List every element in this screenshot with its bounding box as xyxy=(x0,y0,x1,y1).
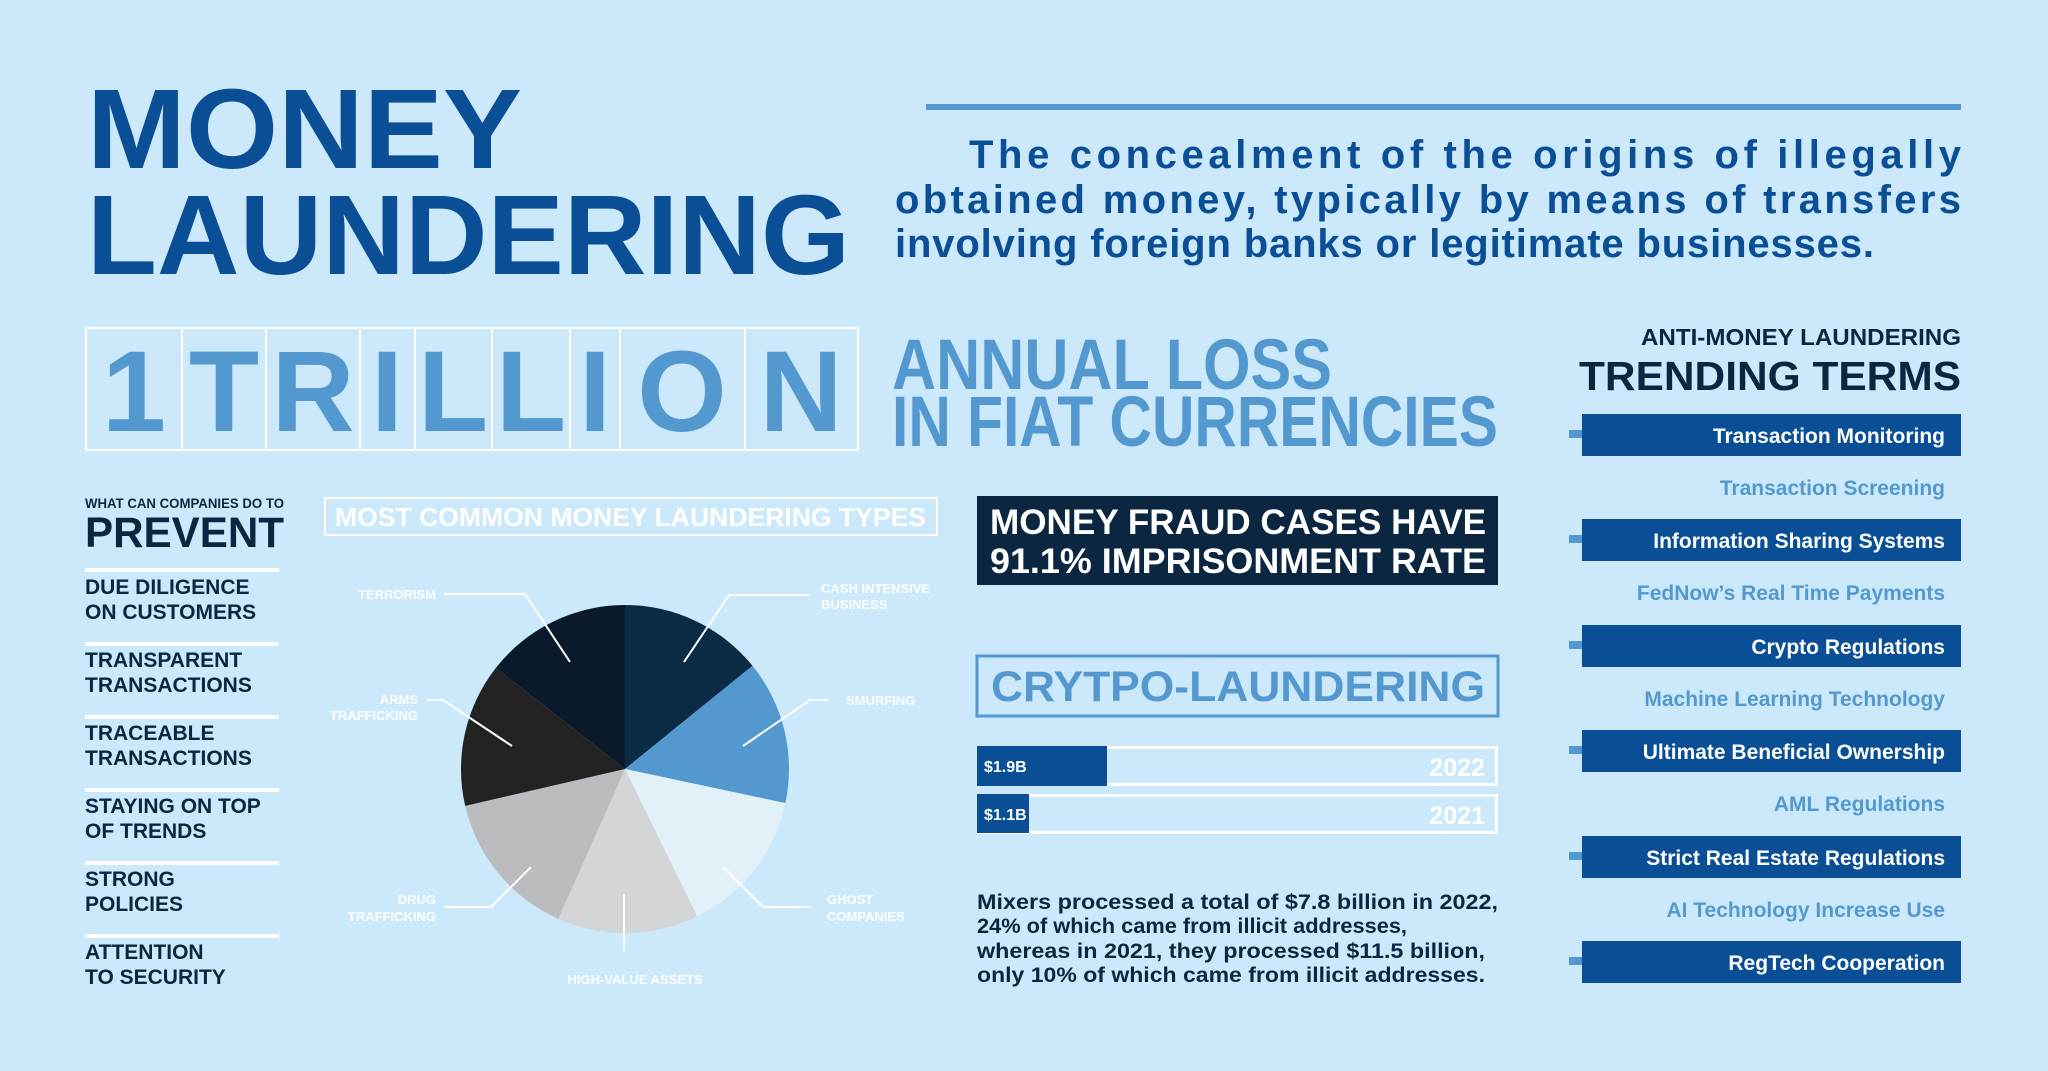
imprisonment rate callout: MONEY FRAUD CASES HAVE xyxy=(990,503,1486,542)
crypto laundering heading: CRYTPO-LAUNDERING xyxy=(991,663,1485,711)
pie chart: laundering types: GHOST xyxy=(827,892,873,907)
bar chart: crypto laundering: $1.9B xyxy=(984,759,1027,776)
bar chart: crypto laundering: 2022 xyxy=(1429,754,1485,782)
prevent list: TO SECURITY xyxy=(85,966,226,989)
annual loss heading: IN FIAT CURRENCIES xyxy=(892,383,1498,462)
prevent list: OF TRENDS xyxy=(85,820,206,843)
mixers paragraph: whereas in 2021, they processed $11.5 billion, xyxy=(976,940,1485,963)
term: FedNow: FedNow’s Real Time Payments xyxy=(1637,582,1945,605)
trending terms list xyxy=(1569,414,1961,983)
prevent heading: WHAT CAN COMPANIES DO TO xyxy=(85,495,284,511)
term: Transaction Screening: Transaction Screening xyxy=(1720,477,1945,500)
1 trillion stat box: R xyxy=(271,328,355,456)
1 trillion stat box: I xyxy=(371,328,403,456)
pie chart: laundering types: HIGH-VALUE ASSETS xyxy=(567,972,703,987)
term: AI Technology: AI Technology Increase Use xyxy=(1666,899,1945,922)
prevent list xyxy=(85,568,279,989)
1 trillion stat box xyxy=(86,328,858,456)
mixers paragraph: only 10% of which came from illicit addresses. xyxy=(977,964,1485,987)
term: Strict Real Estate: Strict Real Estate Regulations xyxy=(1646,847,1945,870)
prevent list: TRANSACTIONS xyxy=(85,674,252,697)
annual loss heading: ANNUAL LOSS xyxy=(892,326,1332,405)
1 trillion stat box: L xyxy=(418,328,488,456)
pie chart: laundering types xyxy=(330,581,930,987)
pie chart heading: MOST COMMON MONEY LAUNDERING TYPES xyxy=(335,502,926,532)
annual loss heading xyxy=(892,326,1498,462)
imprisonment rate callout xyxy=(977,496,1498,585)
term: RegTech: RegTech Cooperation xyxy=(1728,952,1945,975)
trending terms heading: TRENDING TERMS xyxy=(1579,353,1961,399)
term: UBO xyxy=(1569,730,1961,772)
term: Crypto Regulations: Crypto Regulations xyxy=(1751,636,1945,659)
bar chart: crypto laundering: $1.1B xyxy=(984,807,1027,824)
pie chart: laundering types: BUSINESS xyxy=(821,597,888,612)
prevent list: ATTENTION xyxy=(85,941,204,964)
1 trillion stat box: I xyxy=(579,328,611,456)
prevent list: POLICIES xyxy=(85,893,183,916)
definition text xyxy=(895,133,1962,266)
mixers paragraph: Mixers processed a total of $7.8 billion in 2022, xyxy=(977,891,1498,914)
pie chart: laundering types: SMURFING xyxy=(846,693,915,708)
term: AML Regulations: AML Regulations xyxy=(1774,793,1945,816)
1 trillion stat box: O xyxy=(637,328,727,456)
imprisonment rate callout: 91.1% IMPRISONMENT RATE xyxy=(990,542,1486,581)
pie chart: laundering types: TRAFFICKING xyxy=(348,909,436,924)
1 trillion stat box: 1 xyxy=(102,328,166,456)
title: MONEY xyxy=(87,66,522,192)
term: Strict Real Estate xyxy=(1569,836,1961,878)
pie chart: laundering types: TERRORISM xyxy=(358,587,436,602)
trending terms heading xyxy=(1579,324,1961,399)
mixers paragraph: 24% of which came from illicit addresses, xyxy=(977,915,1407,938)
prevent list: TRANSACTIONS xyxy=(85,747,252,770)
prevent list: TRANSPARENT xyxy=(85,649,242,672)
term: Information Sharing Systems: Information Sharing Systems xyxy=(1653,530,1945,553)
pie chart: laundering types: CASH INTENSIVE xyxy=(821,581,930,596)
term: Machine Learning: Machine Learning Technology xyxy=(1644,688,1945,711)
bar chart: crypto laundering: 2021 xyxy=(1429,802,1485,830)
prevent list: TRACEABLE xyxy=(85,722,214,745)
term: UBO: Ultimate Beneficial Ownership xyxy=(1643,741,1945,764)
title xyxy=(87,66,850,298)
term: RegTech xyxy=(1569,941,1961,983)
prevent list: ON CUSTOMERS xyxy=(85,601,256,624)
bar chart: crypto laundering xyxy=(977,746,1496,833)
prevent heading: PREVENT xyxy=(85,509,284,557)
prevent list: STAYING ON TOP xyxy=(85,795,261,818)
term: Transaction Monitoring xyxy=(1569,414,1961,456)
trending terms heading: ANTI-MONEY LAUNDERING xyxy=(1641,324,1961,350)
title: LAUNDERING xyxy=(87,172,850,298)
definition text: The concealment of the origins of illegally xyxy=(969,133,1962,177)
prevent list: DUE DILIGENCE xyxy=(85,576,250,599)
pie chart: laundering types: ARMS xyxy=(380,692,418,707)
term: Transaction Monitoring: Transaction Monitoring xyxy=(1713,425,1945,448)
term: Information Sharing Systems xyxy=(1569,519,1961,561)
pie chart: laundering types: DRUG xyxy=(398,892,436,907)
term: Crypto Regulations xyxy=(1569,625,1961,667)
mixers paragraph xyxy=(976,891,1498,987)
1 trillion stat box: L xyxy=(496,328,566,456)
pie chart: laundering types: TRAFFICKING xyxy=(330,708,418,723)
pie chart: laundering types: COMPANIES xyxy=(827,909,905,924)
1 trillion stat box: N xyxy=(759,328,843,456)
definition text: obtained money, typically by means of transfers xyxy=(895,178,1961,222)
prevent list: STRONG xyxy=(85,868,175,891)
definition text: involving foreign banks or legitimate businesses. xyxy=(895,222,1874,266)
1 trillion stat box: T xyxy=(189,328,259,456)
